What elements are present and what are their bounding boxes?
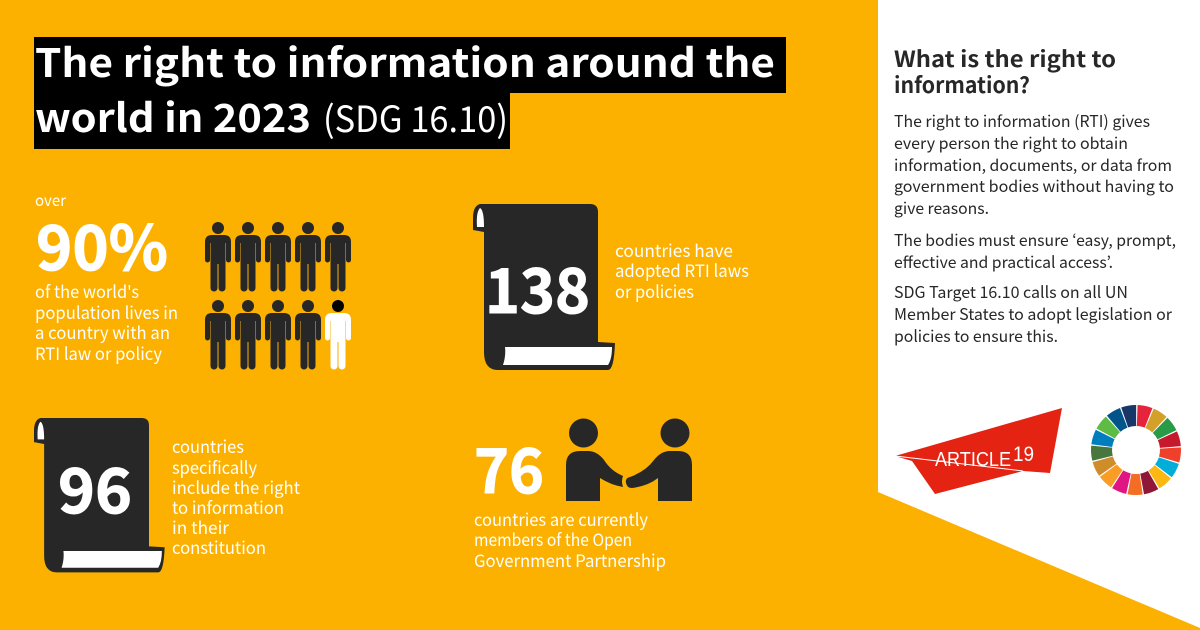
logo: Article 19: 19 xyxy=(1013,443,1034,466)
sidebar text: every person the right to obtain xyxy=(894,130,1128,154)
stat description: specifically xyxy=(172,454,257,479)
sidebar heading: What is the right to xyxy=(894,42,1116,74)
sidebar text: policies to ensure this. xyxy=(894,323,1058,347)
stat description: constitution xyxy=(172,534,266,559)
stat description: countries have xyxy=(615,237,733,262)
stat description: to information xyxy=(172,494,284,519)
sidebar text: The bodies must ensure ‘easy, prompt, xyxy=(894,227,1176,251)
sidebar heading: information? xyxy=(894,68,1030,100)
stat: 76 countries xyxy=(474,421,666,572)
icon: ten people, nine dark one white xyxy=(205,222,351,370)
stat description: members of the Open xyxy=(474,526,632,551)
stat: 90 percent xyxy=(35,187,178,365)
sidebar text xyxy=(894,108,1176,347)
sidebar text: SDG Target 16.10 calls on all UN xyxy=(894,279,1128,303)
sidebar text: Member States to adopt legislation or xyxy=(894,301,1173,325)
stat: 90 percent: 90% xyxy=(36,198,168,288)
sidebar text: information, documents, or data from xyxy=(894,152,1172,176)
stat description: of the world's xyxy=(35,278,139,303)
stat description: Government Partnership xyxy=(474,547,666,572)
stat description: population lives in xyxy=(35,299,178,324)
stat description xyxy=(172,433,301,559)
stat description: adopted RTI laws xyxy=(615,257,749,282)
title: (SDG 16.10) xyxy=(323,91,508,143)
stat description: countries xyxy=(172,433,244,458)
stat description: a country with an xyxy=(35,319,170,344)
icon: handshake xyxy=(566,418,692,501)
sidebar text: The right to information (RTI) gives xyxy=(894,108,1150,132)
logo: SDG wheel xyxy=(1087,401,1185,499)
sidebar text: government bodies without having to xyxy=(894,173,1174,197)
stat description: or policies xyxy=(615,278,694,303)
logo: Article 19 xyxy=(895,408,1062,494)
stat: 90 percent: over xyxy=(35,187,67,211)
sidebar text: effective and practical access’. xyxy=(894,249,1113,273)
title: The right to information around the xyxy=(35,33,775,89)
stat: 138 countries: 138 xyxy=(485,241,590,331)
stat description xyxy=(35,278,178,365)
title xyxy=(34,33,786,149)
sidebar heading xyxy=(894,42,1116,100)
sidebar text: give reasons. xyxy=(894,195,989,219)
panel: what is RTI xyxy=(878,0,1200,628)
stat description: countries are currently xyxy=(474,506,648,531)
icon: scroll 138 xyxy=(473,204,615,370)
stat: 138 countries xyxy=(485,237,749,331)
stat description xyxy=(474,506,666,572)
stat description: RTI law or policy xyxy=(35,340,162,365)
stat description xyxy=(615,237,749,303)
stat: 96 countries: 96 xyxy=(58,441,132,531)
logo: Article 19: ARTICLE xyxy=(935,449,1011,471)
stat description: include the right xyxy=(172,474,301,499)
title: world in 2023 xyxy=(35,88,311,144)
icon: scroll 96 xyxy=(34,418,165,572)
stat description: in their xyxy=(172,514,229,539)
stat: 96 countries xyxy=(58,433,301,559)
stat: 76 countries: 76 xyxy=(474,421,544,511)
